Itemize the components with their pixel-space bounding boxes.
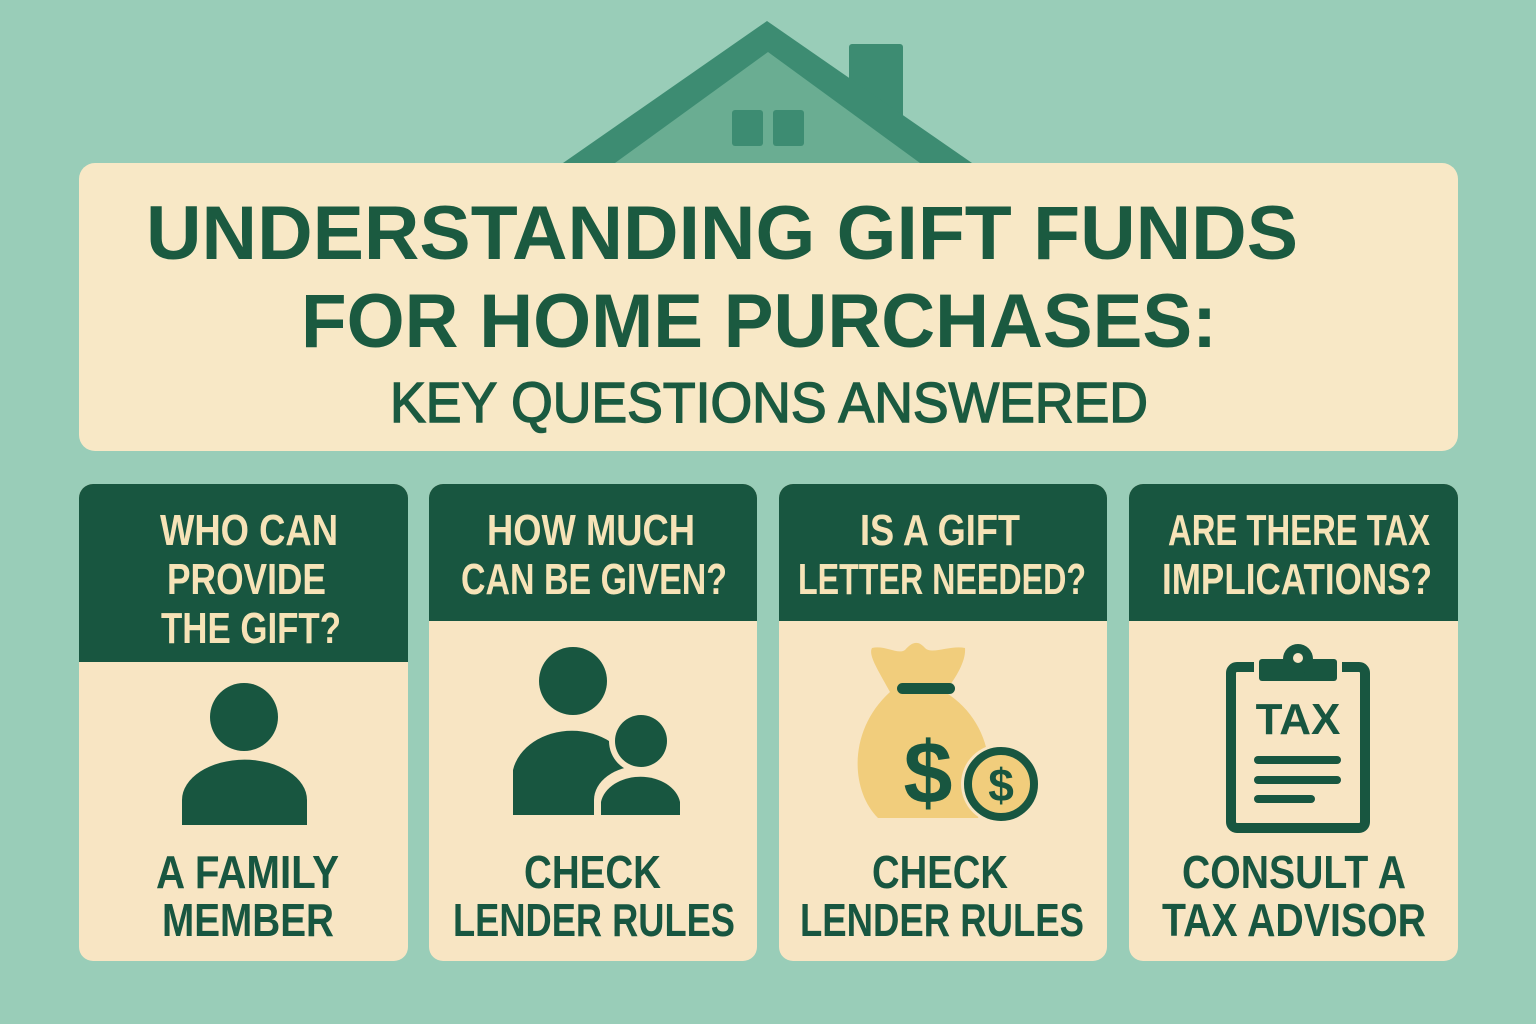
answer: CHECK: [524, 846, 661, 898]
answer: LENDER RULES: [453, 894, 735, 946]
answer: CONSULT A: [1182, 846, 1406, 898]
panel: how much: [429, 484, 757, 961]
heading: [160, 506, 341, 653]
title panel: [79, 163, 1458, 451]
heading: IMPLICATIONS?: [1162, 555, 1432, 604]
heading: WHO CAN: [160, 506, 338, 555]
heading: [798, 506, 1086, 604]
icon: house roof: [563, 21, 972, 163]
heading: THE GIFT?: [161, 604, 341, 653]
answer: MEMBER: [162, 894, 334, 946]
answer: [1162, 846, 1426, 946]
heading: [1162, 506, 1432, 604]
icon: two people: [513, 647, 686, 815]
answer: [453, 846, 735, 946]
answer: TAX ADVISOR: [1162, 894, 1426, 946]
heading: PROVIDE: [167, 555, 326, 604]
heading: HOW MUCH: [487, 506, 695, 555]
icon: person: [182, 683, 307, 825]
answer: LENDER RULES: [800, 894, 1084, 946]
title: [146, 191, 1298, 364]
heading: ARE THERE TAX: [1168, 506, 1430, 555]
heading: CAN BE GIVEN?: [461, 555, 727, 604]
heading: IS A GIFT: [860, 506, 1020, 555]
answer: A FAMILY: [156, 846, 339, 898]
answer: CHECK: [872, 846, 1008, 898]
panel: tax: [1129, 484, 1458, 961]
heading: LETTER NEEDED?: [798, 555, 1086, 604]
answer: [800, 846, 1084, 946]
heading: [461, 506, 727, 604]
icon: tax clipboard: TAX: [1256, 695, 1340, 744]
subtitle: KEY QUESTIONS ANSWERED: [390, 371, 1148, 435]
answer: [156, 846, 339, 946]
icon: money bag: [858, 643, 1041, 824]
title: FOR HOME PURCHASES:: [301, 279, 1217, 364]
panel: gift letter: [779, 484, 1107, 961]
panel: who can provide: [79, 484, 408, 961]
title: UNDERSTANDING GIFT FUNDS: [146, 191, 1298, 276]
icon: money bag: $: [988, 759, 1014, 811]
icon: money bag: $: [904, 723, 952, 822]
icon: tax clipboard: [1231, 644, 1365, 828]
